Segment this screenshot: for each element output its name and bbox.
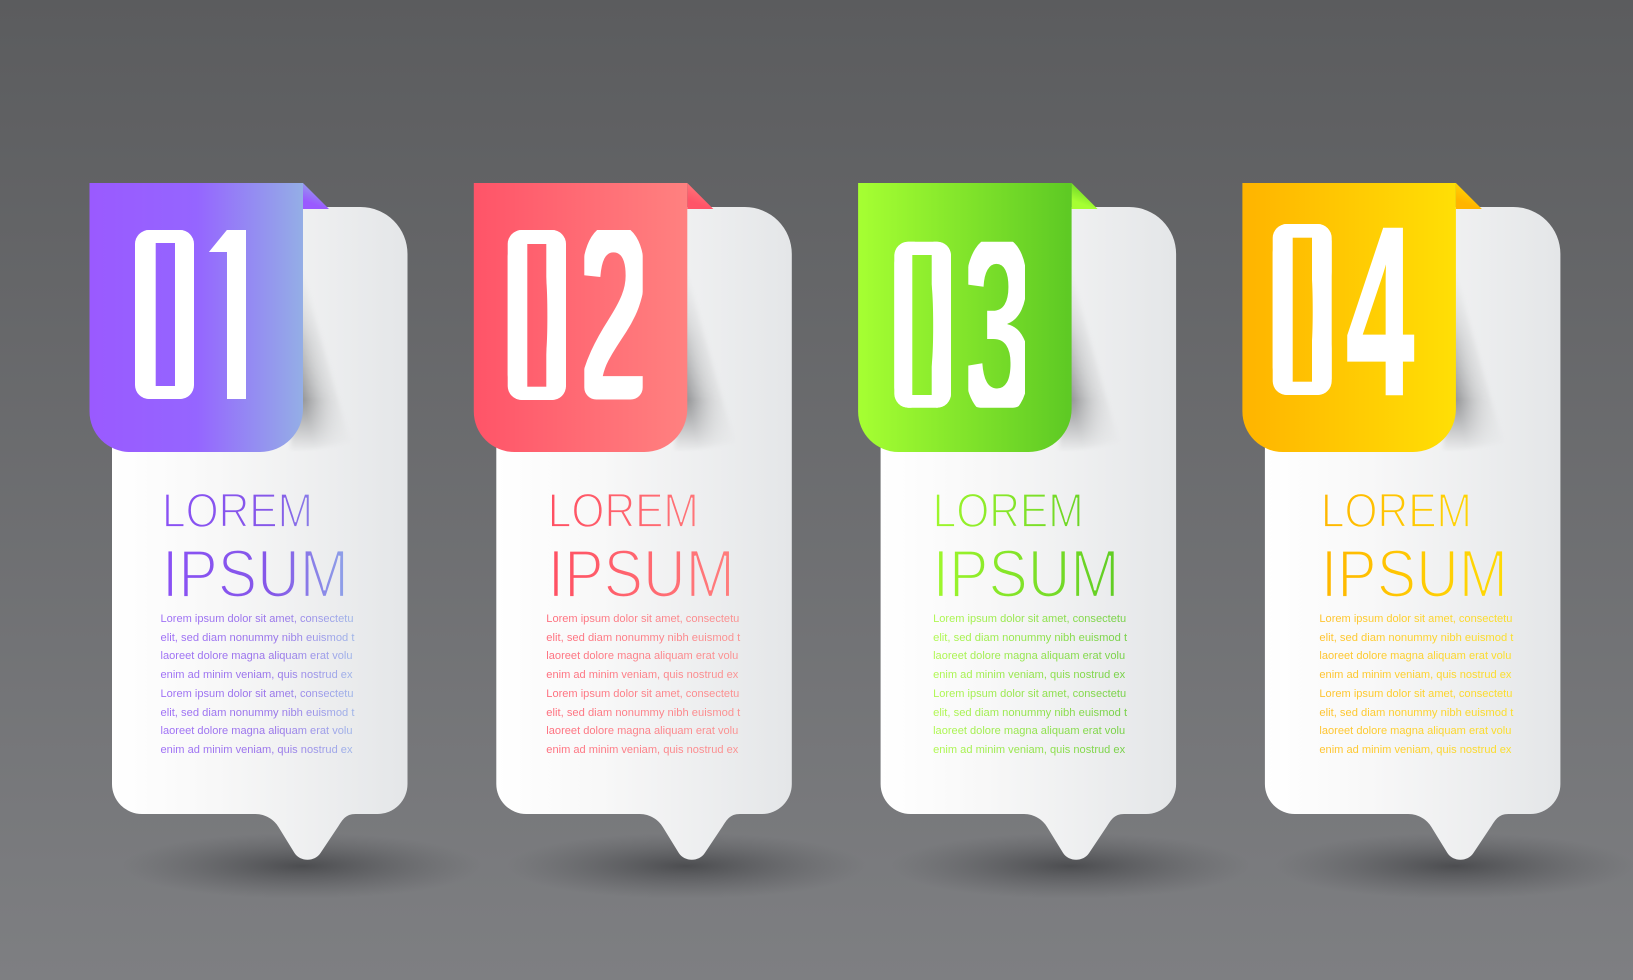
number 03: 0 <box>883 171 966 479</box>
number 02: 2 <box>576 170 651 461</box>
body text: Lorem ipsum dolor sit amet, consectetu <box>1319 613 1512 625</box>
body text: Lorem ipsum dolor sit amet, consectetu <box>1319 688 1512 700</box>
heading: IPSUM <box>1321 536 1508 612</box>
heading: IPSUM <box>162 536 349 612</box>
body text: elit, sed diam nonummy nibh euismod t <box>933 707 1127 719</box>
body text <box>546 613 740 756</box>
card body with pointer <box>881 207 1176 860</box>
number 04: 0 <box>1262 156 1346 464</box>
number 03: 3 <box>961 183 1034 468</box>
page curl shadow <box>1443 292 1492 448</box>
body text: enim ad minim veniam, quis nostrud ex <box>1319 744 1512 756</box>
number 04: 4 <box>1346 177 1414 446</box>
body text: enim ad minim veniam, quis nostrud ex <box>1319 669 1512 681</box>
heading <box>162 485 349 612</box>
heading: IPSUM <box>548 536 735 612</box>
heading: LOREM <box>548 485 699 538</box>
body text: laoreet dolore magna aliquam erat volu <box>160 650 352 662</box>
body text: enim ad minim veniam, quis nostrud ex <box>546 744 739 756</box>
card floor shadow <box>506 833 866 899</box>
folded corner <box>303 183 329 209</box>
number 03 <box>894 242 1025 408</box>
page curl shadow <box>290 292 340 448</box>
heading: IPSUM <box>933 536 1120 612</box>
body text: laoreet dolore magna aliquam erat volu <box>933 650 1125 662</box>
body text <box>1319 613 1513 756</box>
body text: laoreet dolore magna aliquam erat volu <box>933 725 1125 737</box>
body text: elit, sed diam nonummy nibh euismod t <box>1319 632 1513 644</box>
heading: LOREM <box>162 485 313 538</box>
number 01: 0 <box>124 161 208 469</box>
number 01 <box>135 230 246 399</box>
body text: laoreet dolore magna aliquam erat volu <box>546 725 738 737</box>
body text: elit, sed diam nonummy nibh euismod t <box>546 707 740 719</box>
body text: Lorem ipsum dolor sit amet, consectetu <box>546 613 739 625</box>
body text: Lorem ipsum dolor sit amet, consectetu <box>933 688 1126 700</box>
body text: elit, sed diam nonummy nibh euismod t <box>160 707 354 719</box>
card floor shadow <box>1275 833 1633 899</box>
body text: Lorem ipsum dolor sit amet, consectetu <box>160 613 354 625</box>
folded corner <box>1456 183 1482 209</box>
body text: elit, sed diam nonummy nibh euismod t <box>933 632 1127 644</box>
number tab <box>1242 183 1456 452</box>
number 02 <box>508 230 643 400</box>
number 01: 1 <box>198 177 270 451</box>
folded corner <box>687 183 713 209</box>
card body with pointer <box>112 207 408 860</box>
body text <box>933 613 1127 756</box>
page curl shadow <box>1059 294 1108 448</box>
number tab <box>90 183 303 452</box>
body text: enim ad minim veniam, quis nostrud ex <box>546 669 739 681</box>
body text: laoreet dolore magna aliquam erat volu <box>160 725 352 737</box>
card floor shadow <box>891 833 1251 899</box>
page curl shadow <box>674 292 724 448</box>
folded corner <box>1072 183 1098 209</box>
body text: enim ad minim veniam, quis nostrud ex <box>933 669 1126 681</box>
body text: laoreet dolore magna aliquam erat volu <box>1319 725 1511 737</box>
body text <box>160 613 354 756</box>
body text: enim ad minim veniam, quis nostrud ex <box>933 744 1126 756</box>
panel: step 01 <box>90 183 438 891</box>
body text: Lorem ipsum dolor sit amet, consectetu <box>160 688 354 700</box>
body text: elit, sed diam nonummy nibh euismod t <box>1319 707 1513 719</box>
heading: LOREM <box>1321 485 1472 538</box>
number tab <box>474 183 687 452</box>
body text: enim ad minim veniam, quis nostrud ex <box>160 669 353 681</box>
body text: laoreet dolore magna aliquam erat volu <box>1319 650 1511 662</box>
card body with pointer <box>1265 207 1560 860</box>
number tab <box>858 183 1072 452</box>
number 04 <box>1272 224 1414 396</box>
body text: Lorem ipsum dolor sit amet, consectetu <box>546 688 739 700</box>
heading <box>933 485 1120 612</box>
panel: step 03 <box>858 183 1206 891</box>
card body with pointer <box>496 207 792 860</box>
panel: step 04 <box>1242 183 1590 891</box>
body text: elit, sed diam nonummy nibh euismod t <box>160 632 354 644</box>
heading <box>548 485 735 612</box>
body text: enim ad minim veniam, quis nostrud ex <box>160 744 353 756</box>
card floor shadow <box>122 833 482 899</box>
number 02: 0 <box>497 161 580 469</box>
body text: Lorem ipsum dolor sit amet, consectetu <box>933 613 1126 625</box>
heading <box>1321 485 1508 612</box>
body text: elit, sed diam nonummy nibh euismod t <box>546 632 740 644</box>
panel: step 02 <box>474 183 822 891</box>
body text: laoreet dolore magna aliquam erat volu <box>546 650 738 662</box>
heading: LOREM <box>933 485 1084 538</box>
